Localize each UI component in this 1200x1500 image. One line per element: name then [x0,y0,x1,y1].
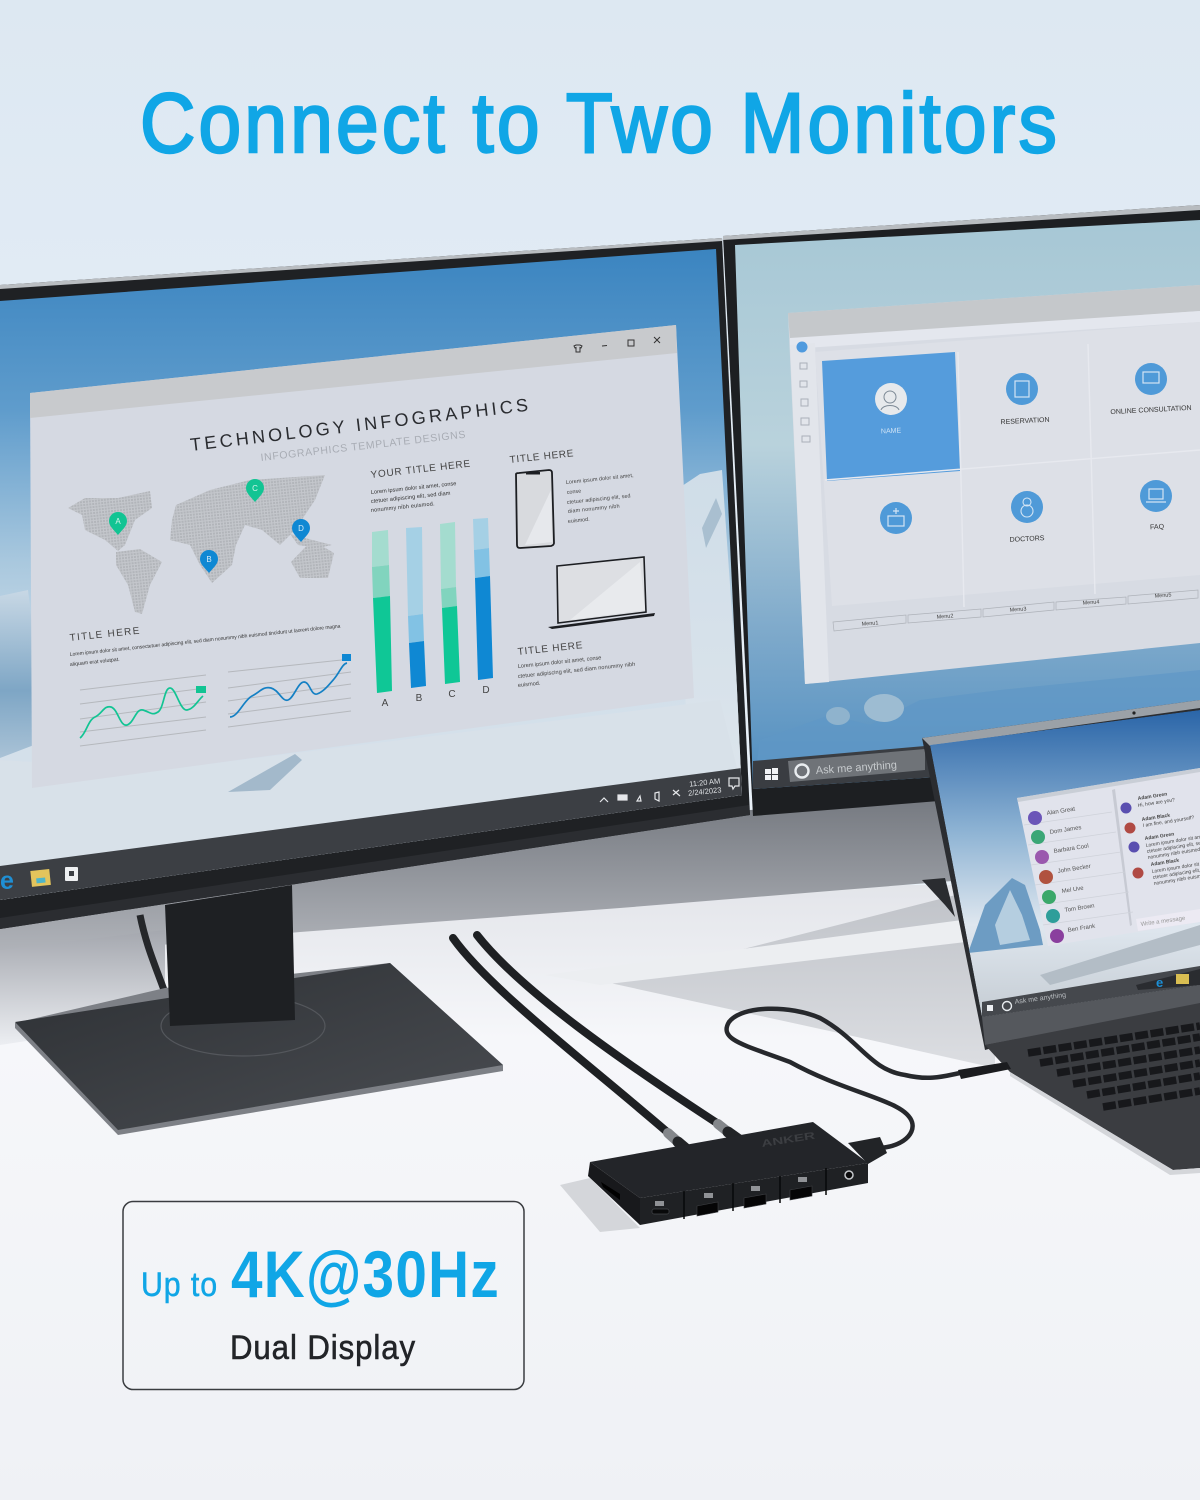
menu tabs: Menu5 [1154,592,1172,600]
phone text: conse [567,489,582,496]
right app window [788,285,1200,684]
left taskbar [0,768,742,900]
laptop taskbar: e [1156,975,1163,990]
map pins: C [252,484,258,493]
laptop illustration text: Lorem ipsum dolor sit amet, conse [518,655,602,670]
online consultation tile [1110,363,1192,416]
desk shadow band [610,885,995,1068]
desk surface [0,885,1200,1500]
bar chart heading: nonummy nibh euismod. [371,501,435,514]
chat messages: Adam Green [1137,791,1168,802]
bar chart [372,518,493,709]
bar chart heading: Lorem ipsum dolor sit amet, conse [371,481,457,496]
doctors tile: DOCTORS [1009,535,1045,544]
left monitor [0,238,750,929]
laptop taskbar [982,966,1200,1017]
infographic window: INFOGRAPHICS TEMPLATE DESIGNS [260,429,466,464]
monitor stand [15,885,503,1135]
chat messages: Adam Black [1150,858,1180,868]
chat messages: Adam Green [1144,831,1175,842]
laptop illustration text [517,640,636,689]
bar chart heading [370,459,471,514]
title: Connect to Two Monitors [140,76,1060,170]
map pins [109,479,310,573]
world map [68,475,334,614]
right taskbar: Ask me anything [815,759,897,777]
contact list: Ben Frank [1067,924,1097,934]
wall shadow under monitors [0,795,965,960]
laptop illustration [548,557,655,629]
laptop screen [930,710,1200,1017]
infographic window [30,325,694,788]
callout box [123,1202,524,1390]
phone illustration [516,470,554,548]
faq tile [1140,480,1172,531]
sub label: Dual Display [230,1329,416,1367]
right monitor [723,205,1200,816]
hdmi cables [453,935,742,1154]
map pins: A [115,517,121,526]
menu tabs: Menu1 [861,620,879,628]
stand foot [15,963,503,1135]
map pins: D [298,524,304,533]
contact list: Barbara Cool [1053,844,1089,855]
contact list: Mel Uve [1061,886,1085,895]
bar chart: A [382,698,389,709]
reservation tile [1000,373,1050,426]
spec line: Up to [141,1266,218,1304]
laptop illustration text: TITLE HERE [517,640,583,658]
right monitor foot [922,878,955,917]
snow mountains [0,590,34,758]
bar chart: D [482,685,490,696]
laptop taskbar: Ask me anything [1014,992,1067,1006]
hub shadow [560,1178,640,1232]
phone text [509,448,634,525]
laptop [922,700,1200,1175]
hospital tile [880,502,912,534]
chat messages: Adam Black [1141,813,1171,823]
left text block: TITLE HERE [69,626,140,644]
right monitor screen [730,215,1200,790]
online consultation tile: ONLINE CONSULTATION [1110,405,1192,416]
menu tabs [833,590,1198,631]
usb-c host cable [727,1009,960,1148]
stand cable [140,915,164,990]
sidebar icons [796,342,810,442]
spec line: 4K@30Hz [231,1237,500,1311]
contact list: Dom James [1049,825,1082,836]
laptop illustration text: ctetuer adipiscing elit, sed diam nonummy nibh [518,662,636,680]
laptop wallpaper mountain [968,878,1043,953]
left taskbar: 2/24/2023 [688,785,722,798]
hub logo: ANKER [761,1130,817,1150]
left taskbar: e [0,867,14,895]
chat messages [1120,791,1200,931]
left taskbar: 11:20 AM [689,776,721,789]
menu tabs: Menu3 [1009,606,1027,614]
left text block: aliquam erat volutpat. [70,657,120,668]
contact list: Tom Brown [1064,903,1095,914]
laptop illustration text: euismod. [518,681,541,689]
laptop lid [922,700,1200,1050]
doctors tile [1009,491,1045,544]
spec line [141,1237,500,1311]
right taskbar [753,746,930,789]
usb-c plug [958,1062,1011,1079]
keyboard [1028,1026,1200,1107]
laptop base [985,1003,1200,1170]
left monitor screen [0,245,750,905]
stand neck [165,885,295,1026]
bar chart heading: YOUR TITLE HERE [370,459,471,481]
reservation tile: RESERVATION [1000,417,1050,426]
background wall [0,0,1200,950]
phone text: TITLE HERE [509,448,574,466]
hub ports [601,1171,853,1216]
chat messages: I am fine, and yourself? [1142,815,1195,829]
laptop lower bezel [982,985,1200,1045]
left text block: Lorem ipsum dolor sit amet, consectetuer adipiscing elit, sed diam nonummy nibh euismod tincidunt ut laoreet dolore magna [70,624,341,658]
bar chart heading: ctetuer adipiscing elit, sed diam [371,491,451,505]
contact list [1024,807,1133,943]
contact list: John Becker [1057,864,1091,875]
window controls [574,337,660,352]
chat messages: nonummy nibh euismod [1147,847,1200,861]
phone text: euismod. [568,517,590,525]
chat messages: Hi, how are you? [1137,797,1176,809]
chat messages: Write a message [1140,916,1186,928]
map pins: B [206,555,212,564]
faq tile: FAQ [1150,524,1165,531]
menu tabs: Menu4 [1082,599,1100,607]
chat window [1017,768,1200,946]
infographic heading: TECHNOLOGY INFOGRAPHICS [189,395,529,455]
menu tabs: Menu2 [936,613,954,621]
bar chart: B [416,693,423,704]
phone text: diam nonummy nibh [568,504,620,515]
blue name tile [822,352,960,481]
grid lines [825,344,1200,607]
line chart green [80,675,206,746]
line chart blue [228,654,351,727]
bar chart: C [448,689,456,700]
anker hub [588,1122,887,1225]
blue name tile: NAME [881,427,902,436]
phone text: Lorem ipsum dolor sit amet, [566,473,634,486]
contact list: Alan Great [1046,807,1076,817]
phone text: ctetuer adipiscing elit, sed [567,493,631,506]
